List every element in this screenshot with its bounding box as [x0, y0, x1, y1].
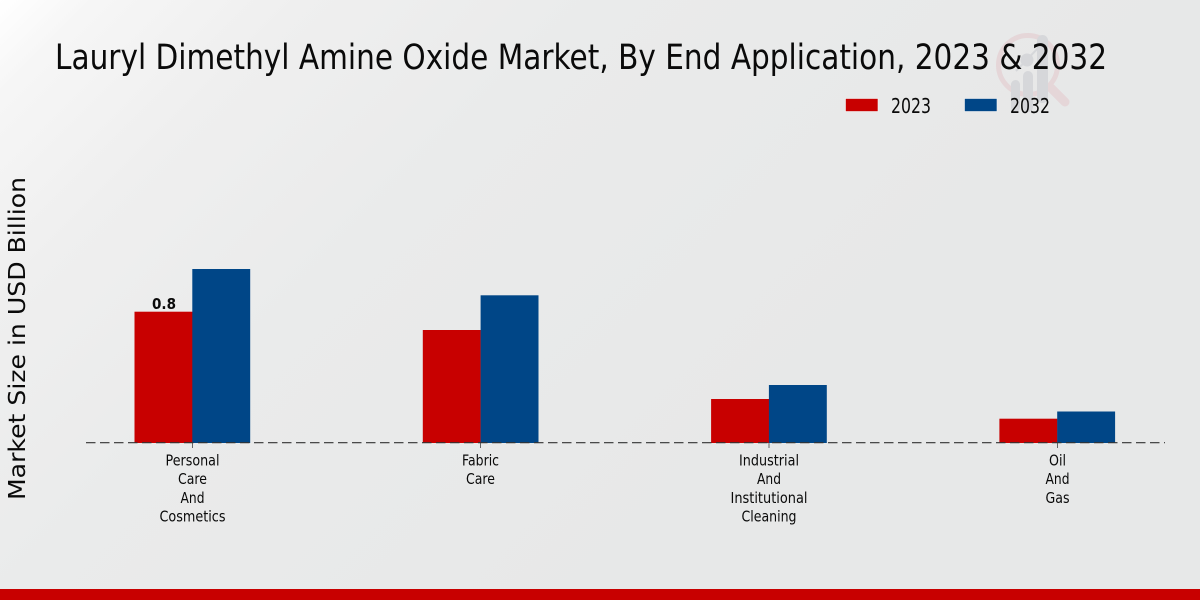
category label: Personal Care And Cosmetics: Cosmetics	[160, 508, 226, 526]
category label: Industrial And Institutional Cleaning: Cleaning	[742, 508, 796, 526]
legend label: 2023: 2023	[891, 94, 931, 118]
category label: Personal Care And Cosmetics: And	[180, 489, 204, 507]
bar chart	[134, 269, 1115, 443]
category label: Industrial And Institutional Cleaning: And	[757, 470, 781, 488]
category label: Personal Care And Cosmetics: Personal	[166, 452, 220, 470]
legend swatch: 2032	[964, 98, 997, 112]
data label: 0.8: 0.8	[152, 295, 176, 313]
bars: Industrial And Institutional Cleaning	[711, 385, 827, 443]
category label: Industrial And Institutional Cleaning	[730, 452, 808, 526]
x axis baseline	[86, 442, 1165, 444]
y axis label: Market Size in USD Billion	[3, 177, 31, 500]
category label: Fabric Care	[462, 452, 499, 488]
category label: Oil And Gas: Gas	[1046, 489, 1070, 507]
category label: Industrial And Institutional Cleaning: Institutional	[730, 489, 808, 507]
category label: Oil And Gas	[1046, 452, 1070, 507]
bottom red band	[0, 589, 1200, 600]
category label: Fabric Care: Care	[466, 470, 495, 488]
category label: Fabric Care: Fabric	[462, 452, 499, 470]
category label: Oil And Gas: And	[1046, 470, 1070, 488]
category label: Personal Care And Cosmetics	[160, 452, 226, 526]
legend label: 2032: 2032	[1010, 94, 1050, 118]
bars: Fabric Care	[423, 295, 538, 443]
legend	[846, 94, 1050, 118]
category label: Industrial And Institutional Cleaning: Industrial	[739, 452, 799, 470]
category label: Oil And Gas: Oil	[1049, 452, 1066, 470]
category label: Personal Care And Cosmetics: Care	[178, 470, 207, 488]
legend swatch: 2023	[846, 98, 878, 112]
watermark logo icon	[998, 35, 1065, 112]
bars: Personal Care And Cosmetics	[134, 269, 250, 443]
bars: Oil And Gas	[999, 412, 1115, 443]
